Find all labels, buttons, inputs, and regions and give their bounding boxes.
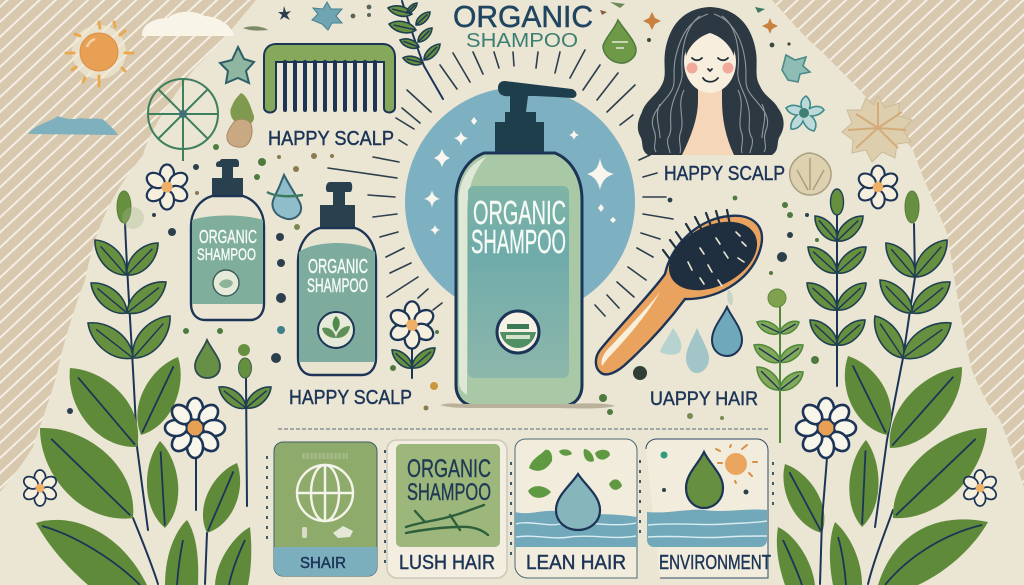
small bottle 2 bbox=[298, 182, 376, 375]
background: striped right corner bbox=[772, 0, 1024, 487]
bottom panel: lean hair bbox=[515, 439, 637, 578]
neck and chest bbox=[682, 88, 734, 155]
bottom panel: lush hair: ORGANIC bbox=[407, 455, 491, 483]
bottle body bbox=[456, 153, 582, 406]
faint marks bbox=[302, 453, 348, 459]
small bottle 1 bbox=[191, 159, 264, 320]
small flower right bbox=[962, 470, 998, 506]
bottle name bbox=[471, 194, 566, 260]
small bud plant bbox=[215, 344, 275, 506]
blue circle behind main bottle bbox=[405, 87, 635, 317]
plant: left tall bbox=[21, 191, 251, 585]
stems bbox=[125, 222, 158, 584]
face bbox=[684, 31, 736, 93]
mini sun bbox=[716, 445, 757, 483]
brush pins bbox=[688, 232, 746, 286]
water bbox=[647, 510, 767, 547]
title: ORGANIC bbox=[453, 0, 593, 34]
brush highlight bbox=[601, 292, 660, 366]
bottle label bbox=[468, 186, 569, 378]
scattered speckles bbox=[67, 144, 819, 420]
hair bbox=[638, 7, 784, 155]
leaves sprig bbox=[406, 505, 488, 535]
daisy right bbox=[796, 398, 856, 584]
happy scalp label: lower: HAPPY SCALP bbox=[289, 387, 412, 409]
plant: small green middle bbox=[750, 289, 807, 443]
icon: teal flower one bbox=[782, 55, 810, 82]
bottom panel: shair: SHAIR bbox=[300, 555, 346, 572]
bottom dashed divider bbox=[278, 428, 770, 430]
outlined leaves bbox=[88, 234, 133, 281]
green drop left bbox=[195, 340, 220, 378]
happy scalp label: top left: HAPPY SCALP bbox=[268, 128, 394, 150]
icon: wheel bbox=[148, 79, 218, 161]
bottom panel: lush hair bbox=[387, 440, 507, 578]
eyes and smile bbox=[692, 58, 728, 82]
happy scalp label: right: HAPPY SCALP bbox=[664, 163, 785, 185]
sparkles bbox=[424, 117, 616, 235]
happy hair label: UAPPY HAIR bbox=[650, 389, 758, 410]
bottom panel: shair bbox=[274, 442, 377, 576]
sunburst rays bbox=[328, 50, 673, 316]
leaf: bottom centre one bbox=[165, 520, 198, 585]
pump head bbox=[495, 81, 576, 153]
large leaves bbox=[53, 353, 154, 462]
bottom panel: environment bbox=[646, 439, 771, 578]
icon: teal flower two bbox=[786, 96, 824, 131]
small flower left bbox=[22, 470, 58, 506]
icon: blue water drops bbox=[633, 290, 742, 380]
decorative dashes beside panels bbox=[267, 450, 773, 570]
shadow under main bottle bbox=[440, 403, 615, 408]
icon: white cloud bbox=[142, 12, 234, 36]
title: SHAMPOO bbox=[466, 30, 578, 52]
leaf: bottom right small bbox=[777, 527, 815, 585]
green drop bbox=[686, 452, 723, 508]
icon: flower upper left bbox=[144, 164, 190, 210]
flower top right bbox=[856, 166, 900, 208]
brush bristles outer bbox=[663, 210, 730, 270]
globe icon bbox=[297, 465, 353, 521]
bottom panel: lush hair: LUSH HAIR bbox=[399, 552, 495, 574]
icon: comb bbox=[264, 44, 395, 112]
plant: right centre bbox=[802, 189, 871, 386]
bottle name: SHAMPOO bbox=[471, 223, 566, 260]
leaf: bottom left big bbox=[36, 520, 147, 585]
icons: top small stars bbox=[243, 2, 371, 31]
hair parting over forehead bbox=[686, 20, 734, 56]
cheeks bbox=[686, 62, 698, 74]
green blobs bbox=[528, 449, 622, 498]
bottle name: ORGANIC bbox=[473, 194, 566, 231]
brush pad bbox=[658, 208, 768, 304]
icon: sparkle stars near hair bbox=[600, 2, 791, 47]
main shampoo bottle bbox=[456, 81, 582, 406]
woman with long dark hair bbox=[638, 7, 784, 155]
flower with leaves centre bbox=[388, 301, 439, 378]
plant: right tall bbox=[772, 191, 1004, 585]
leaf: bottom centre two bbox=[215, 527, 251, 585]
bottom panel: lush hair: SHAMPOO bbox=[407, 479, 491, 506]
icon: seed pod bbox=[227, 93, 254, 147]
bottom panel: lean hair: LEAN HAIR bbox=[526, 552, 626, 574]
title bbox=[453, 0, 593, 52]
background: striped left corner bbox=[0, 0, 256, 492]
icon: green drop top bbox=[603, 20, 636, 63]
brush body bbox=[596, 216, 762, 374]
small bottle 2: ORGANIC bbox=[308, 256, 368, 278]
bottle highlight bbox=[459, 157, 486, 395]
hair strands bbox=[652, 14, 768, 153]
water drop bbox=[556, 474, 600, 530]
small bottle 1: SHAMPOO bbox=[197, 245, 256, 264]
icon: sprig top bbox=[387, 1, 443, 99]
small bottle 1: ORGANIC bbox=[199, 227, 257, 247]
icon: hair brush bbox=[596, 208, 768, 374]
icon: blue drop with leaf bbox=[267, 175, 303, 219]
bottle badge bbox=[497, 311, 539, 353]
daisy left bbox=[165, 398, 225, 510]
water bbox=[515, 511, 637, 547]
leaf: bottom right big bbox=[878, 519, 988, 585]
icon: sun top left bbox=[66, 22, 133, 86]
bottom panel: environment: ENVIRONMENT bbox=[659, 552, 771, 574]
icon: shell small bbox=[790, 153, 831, 195]
icon: shell large bbox=[842, 96, 912, 162]
icon: blue cloud bbox=[28, 116, 118, 135]
icon: green star bbox=[220, 47, 254, 83]
small bottle 2: SHAMPOO bbox=[307, 276, 368, 297]
leaf: bottom right middle bbox=[830, 522, 862, 585]
